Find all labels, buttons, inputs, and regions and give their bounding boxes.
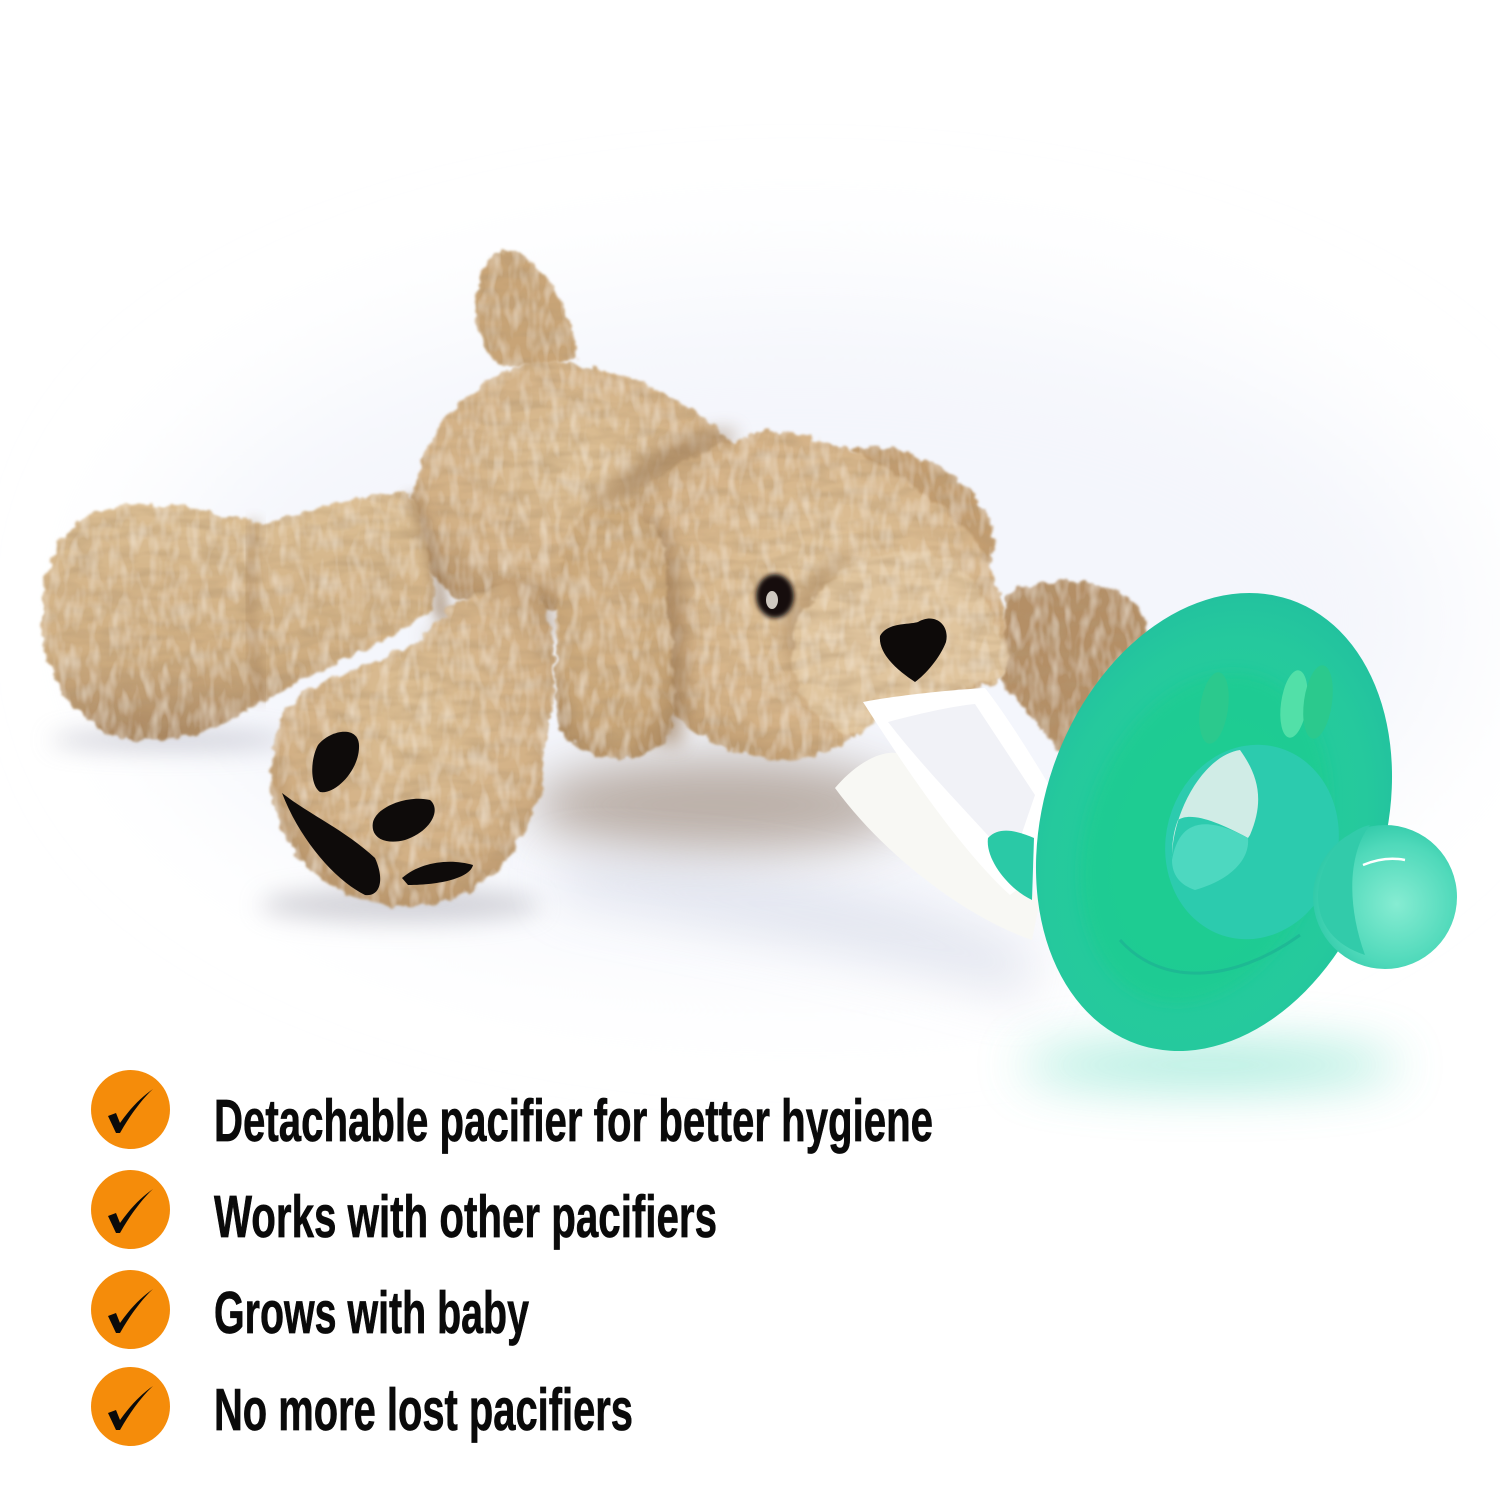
item 1: Detachable pacifier for better hygiene [214, 1088, 933, 1154]
nipple ball [1313, 825, 1457, 969]
near ear [555, 504, 673, 759]
front leg and paw [271, 583, 554, 907]
ventilation holes [1195, 663, 1337, 746]
muzzle [792, 551, 1004, 735]
illustration: plush puppy [42, 251, 1147, 907]
item 2: Works with other pacifiers [214, 1184, 717, 1250]
head shadow on body [590, 430, 735, 505]
item 3 [91, 1270, 529, 1349]
item 4 [91, 1367, 633, 1446]
nose [880, 619, 947, 682]
item 1 [91, 1070, 933, 1154]
tail [476, 251, 578, 367]
eye [756, 574, 794, 618]
item 4: No more lost pacifiers [214, 1377, 633, 1443]
head [610, 432, 1007, 759]
body [411, 362, 735, 612]
item 2 [91, 1170, 717, 1250]
ear shadow on head [640, 520, 686, 745]
back leg [42, 492, 434, 740]
pacifier [977, 544, 1457, 1100]
shield [977, 544, 1451, 1100]
far ear [850, 448, 994, 565]
nipple opening [1172, 750, 1258, 860]
soft backdrop and shadows [50, 290, 1460, 1087]
checklist [91, 1070, 933, 1446]
rear tab [988, 831, 1034, 900]
muzzle shadow [780, 545, 860, 700]
smile ridge [1120, 935, 1300, 973]
leg and body crease shadows [250, 495, 560, 700]
nipple base [1144, 725, 1360, 959]
paw pads [282, 732, 473, 895]
far arm [1003, 582, 1147, 760]
item 3: Grows with baby [214, 1280, 529, 1346]
velcro strap [835, 688, 1052, 940]
